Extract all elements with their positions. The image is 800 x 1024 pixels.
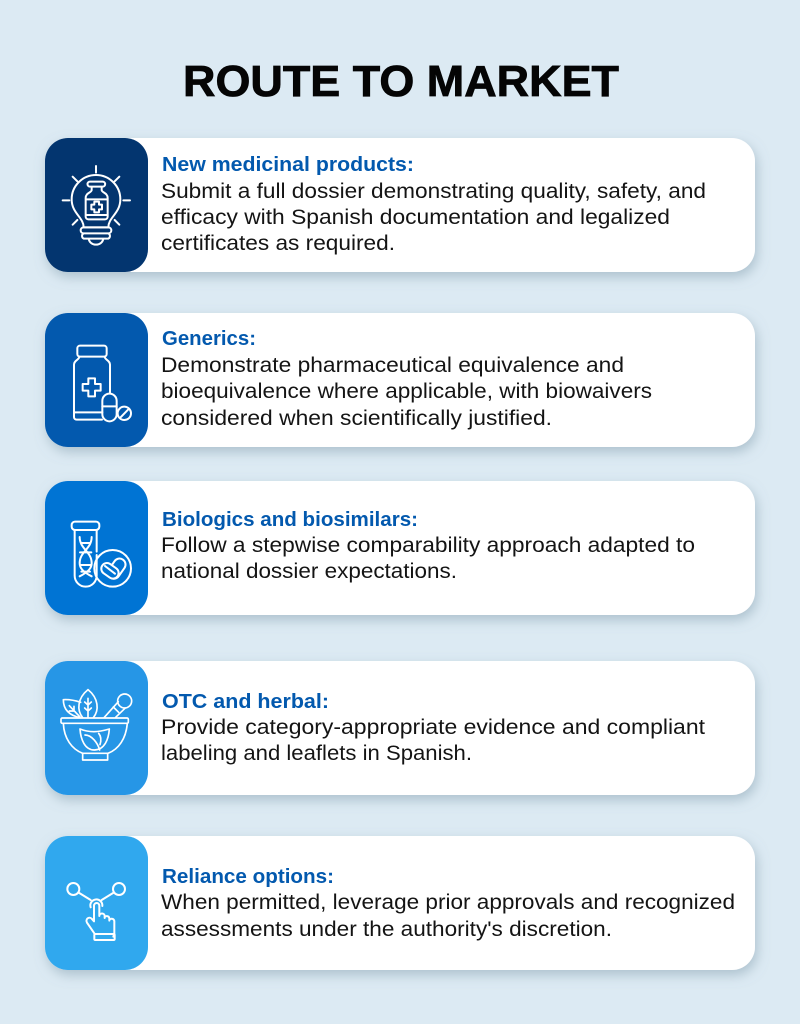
title: ROUTE TO MARKET — [183, 57, 619, 106]
heading: New medicinal products: — [162, 153, 414, 176]
body text: assessments under the authority's discretion. — [161, 918, 612, 941]
body text: Demonstrate pharmaceutical equivalence and — [161, 354, 624, 377]
body text: When permitted, leverage prior approvals and recognized — [161, 891, 735, 914]
body text: Follow a stepwise comparability approach adapted to — [161, 534, 695, 557]
card background — [45, 313, 755, 447]
icon tile — [45, 661, 148, 795]
body text — [161, 354, 652, 430]
icon tile — [45, 313, 148, 447]
body text — [161, 891, 735, 941]
body text — [161, 716, 705, 765]
panel: biologics and biosimilars — [45, 481, 755, 615]
body text: Provide category-appropriate evidence and compliant — [161, 716, 705, 739]
panel: OTC and herbal — [45, 661, 755, 795]
icon: medicine bottle with capsule and tablet — [74, 346, 131, 421]
body text: certificates as required. — [161, 232, 395, 255]
body text: bioequivalence where applicable, with biowaivers — [161, 380, 652, 403]
body text: labeling and leaflets in Spanish. — [161, 742, 472, 765]
body text: efficacy with Spanish documentation and legalized — [161, 206, 670, 229]
card background — [45, 661, 755, 795]
heading: OTC and herbal: — [162, 690, 329, 713]
panel: generics — [45, 313, 755, 447]
icon: network with pointing hand — [67, 883, 125, 940]
card background — [45, 481, 755, 615]
body text — [161, 534, 695, 583]
body text — [161, 180, 706, 255]
heading: Generics: — [162, 327, 256, 350]
body text: considered when scientifically justified. — [161, 407, 552, 430]
card background — [45, 836, 755, 970]
body text: national dossier expectations. — [161, 560, 457, 583]
body text: Submit a full dossier demonstrating quality, safety, and — [161, 180, 706, 203]
panel: reliance options — [45, 836, 755, 970]
card background — [45, 138, 755, 272]
icon tile — [45, 481, 148, 615]
icon: test tube with DNA and pills — [72, 522, 131, 587]
icon: mortar, pestle and herbs — [61, 690, 132, 760]
heading: Biologics and biosimilars: — [162, 508, 418, 531]
icon tile — [45, 836, 148, 970]
panel: new medicinal products — [45, 138, 755, 272]
heading: Reliance options: — [162, 865, 334, 888]
icon tile — [45, 138, 148, 272]
icon: light bulb with medicine vial — [63, 166, 130, 245]
